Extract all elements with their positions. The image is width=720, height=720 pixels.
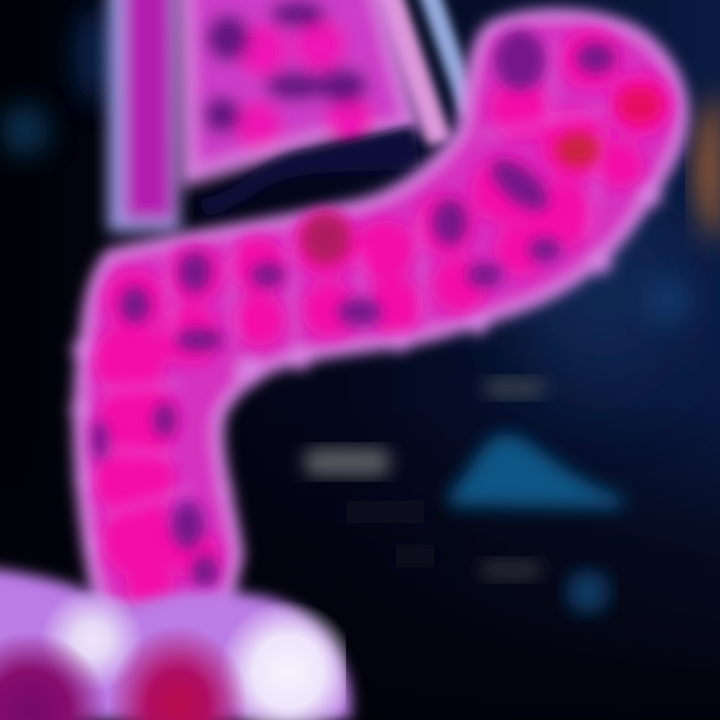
structure: chain body outline	[70, 14, 683, 610]
structure: bottom bulbs	[0, 560, 346, 720]
structure: magenta beads	[94, 30, 672, 609]
structure: vertical bar	[108, 0, 180, 232]
glow: blue right spot	[648, 276, 688, 324]
structure: dark wavy band	[198, 126, 420, 216]
structure: lilac mesh highlights	[100, 40, 610, 515]
structure: red accents	[302, 87, 662, 264]
glow: blue left spot	[1, 104, 49, 156]
background	[64, 0, 720, 624]
smudge: grey label top	[484, 378, 546, 398]
structure: upper block	[184, 0, 414, 178]
structure: dark bead centres	[92, 30, 615, 589]
structure: diagonal strips	[376, 0, 472, 152]
icon: blue triangle	[448, 434, 626, 508]
structure: bottom bulb silhouette	[0, 566, 351, 720]
icon: blue dot	[566, 570, 610, 614]
smudge: grey label bottom	[480, 560, 542, 580]
smudge: faint lines	[340, 506, 440, 562]
glow: orange right edge	[698, 90, 720, 245]
smudge: grey label left	[304, 448, 390, 476]
